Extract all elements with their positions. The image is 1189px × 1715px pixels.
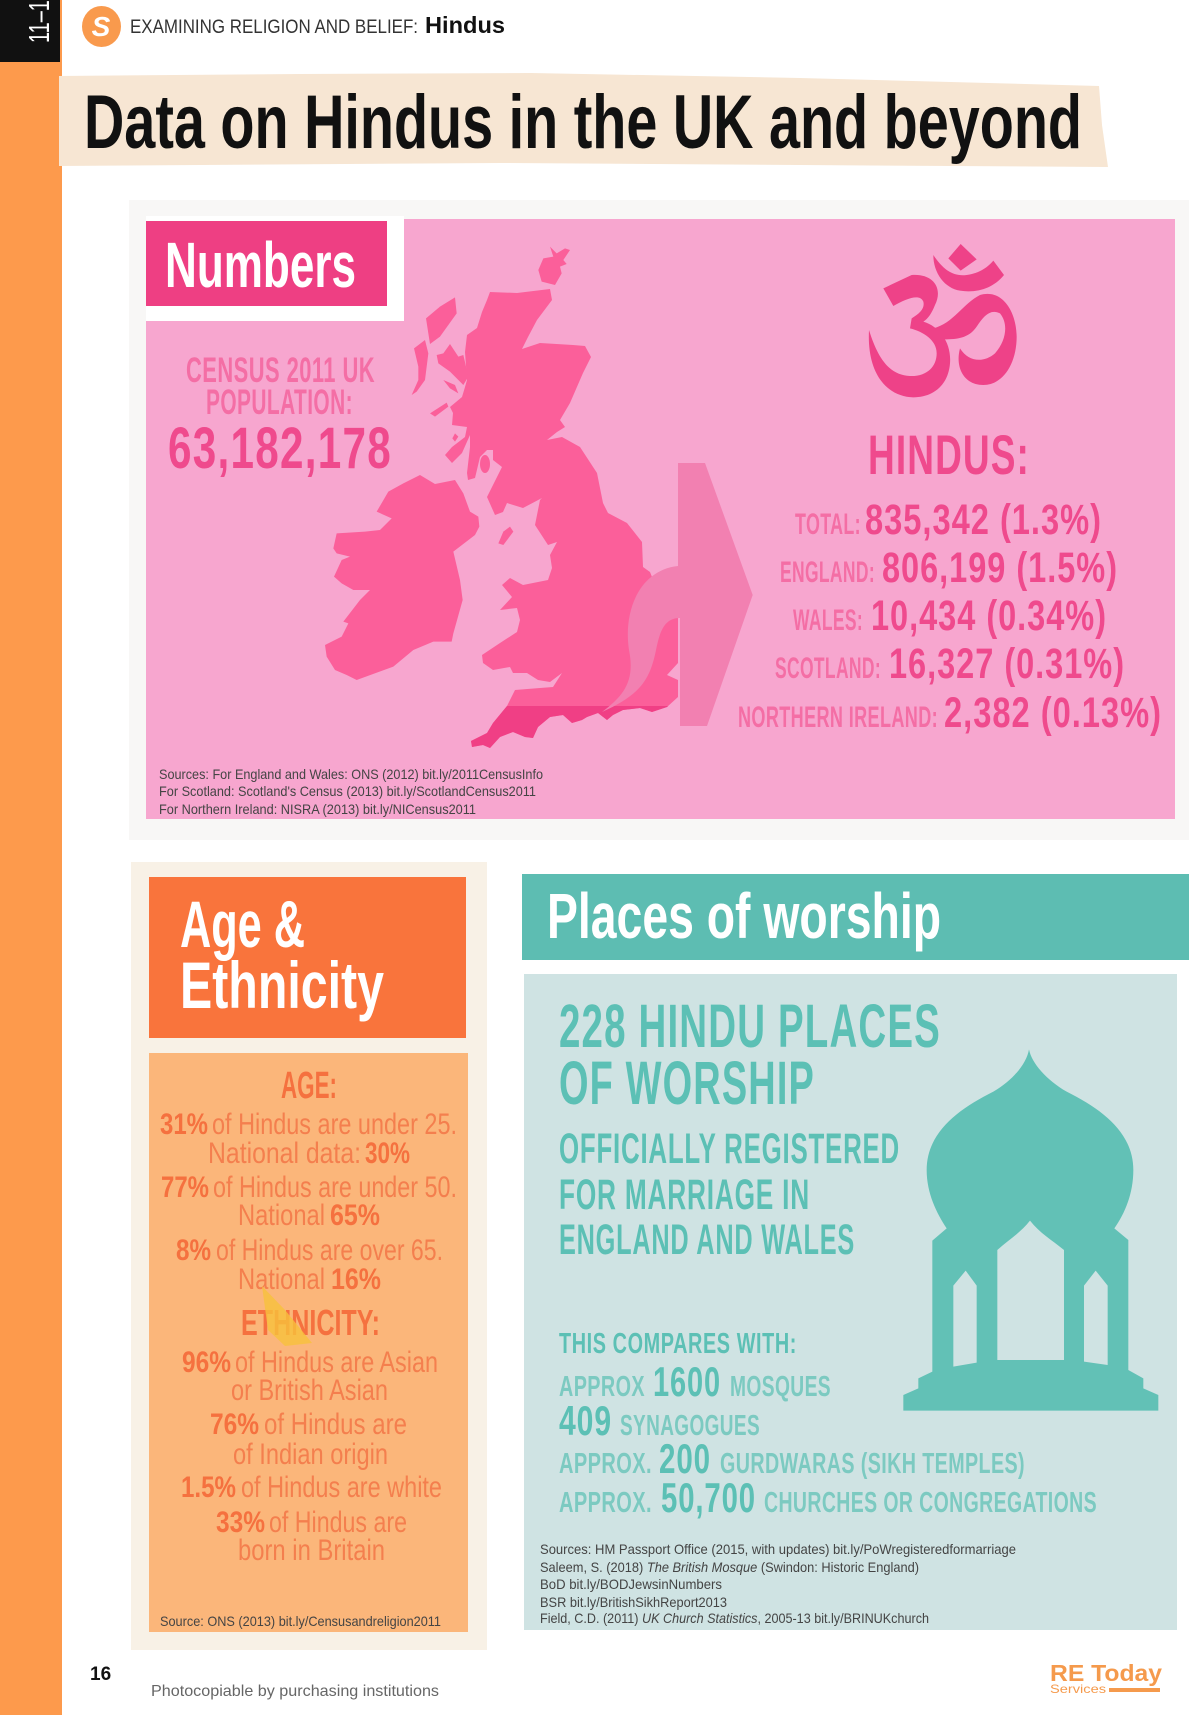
heading: age and ethnicity: Age & [180, 887, 305, 961]
panel: places of worship [522, 874, 1189, 1630]
census population: 63,182,178 [168, 416, 392, 481]
worship headline: 228 HINDU PLACES [559, 992, 941, 1060]
title band [59, 73, 1108, 167]
ethnicity stats: of Hindus are Asian [235, 1346, 438, 1379]
age stats [160, 1065, 457, 1296]
row: gurdwaras: APPROX. [559, 1448, 652, 1480]
age stats: of Hindus are over 65. [216, 1234, 443, 1267]
census population: CENSUS 2011 UK [186, 351, 375, 390]
comparison list: THIS COMPARES WITH: [559, 1328, 797, 1360]
row: northern ireland [738, 689, 1162, 737]
logo: RE Today: Services [1050, 1682, 1106, 1696]
worship headline: OF WORSHIP [559, 1049, 815, 1117]
sources: worship: Saleem, S. (2018) The British Mosque (Swindon: Historic England) [540, 1559, 919, 1575]
heading: numbers: Numbers [165, 229, 356, 301]
comparison list [559, 1328, 1097, 1521]
heading: places of worship: Places of worship [547, 880, 941, 952]
logo: RE Today: RE Today [1050, 1660, 1162, 1686]
row: gurdwaras [559, 1435, 1025, 1482]
row: mosques: APPROX [559, 1371, 645, 1403]
age stats: 30% [365, 1137, 410, 1170]
ethnicity stats: 96% [182, 1346, 231, 1379]
row: churches: 50,700 [661, 1474, 756, 1521]
row: wales: WALES: [793, 604, 863, 637]
ethnicity stats: or British Asian [231, 1374, 388, 1407]
row: northern ireland: NORTHERN IRELAND: [738, 701, 938, 734]
sources: numbers [159, 766, 543, 817]
census population: POPULATION: [206, 383, 353, 422]
ethnicity stats: of Hindus are [264, 1408, 407, 1441]
row: england [780, 544, 1118, 592]
section label [130, 12, 505, 38]
hindus totals: HINDUS: [868, 423, 1030, 486]
ethnicity stats: of Hindus are white [241, 1471, 442, 1504]
row: scotland: SCOTLAND: [775, 652, 881, 685]
section header [82, 6, 505, 47]
arrow [602, 463, 753, 726]
icon: temple [903, 1049, 1158, 1411]
sources: worship: BoD bit.ly/BODJewsinNumbers [540, 1576, 722, 1592]
row: scotland [775, 640, 1125, 688]
row: mosques [559, 1358, 831, 1405]
age stats: National [238, 1263, 325, 1296]
worship headline: FOR MARRIAGE IN [559, 1171, 810, 1219]
heading: age and ethnicity: Ethnicity [180, 948, 384, 1022]
worship headline: OFFICIALLY REGISTERED [559, 1125, 900, 1173]
footer [90, 1660, 1162, 1700]
worship headline: ENGLAND AND WALES [559, 1216, 855, 1264]
yellow mark [262, 1286, 312, 1346]
page number: 16 [90, 1664, 111, 1685]
age stats: National data: [208, 1137, 361, 1170]
panel: numbers [129, 200, 1189, 840]
census population [168, 351, 392, 481]
row: synagogues [559, 1397, 760, 1444]
south coast shading [471, 706, 668, 748]
age stats: 65% [330, 1199, 380, 1232]
age stats: AGE: [281, 1065, 337, 1107]
age stats: of Hindus are under 25. [212, 1108, 457, 1141]
row: synagogues: 409 [559, 1397, 612, 1444]
row: synagogues: SYNAGOGUES [620, 1410, 760, 1442]
sources: worship: Sources: HM Passport Office (2015, with updates) bit.ly/PoWregisteredformarriage [540, 1541, 1016, 1557]
scottish islands [412, 247, 570, 473]
sources: worship: Field, C.D. (2011) UK Church Statistics, 2005-13 bit.ly/BRINUKchurch [540, 1610, 929, 1626]
row: england: 806,199 (1.5%) [882, 544, 1118, 592]
icon: om symbol [869, 244, 1017, 397]
panel: age and ethnicity [131, 862, 487, 1650]
orange side strip with age tab [0, 0, 62, 1715]
row: total [795, 496, 1102, 544]
hindus totals [738, 423, 1162, 737]
age stats: 8% [176, 1234, 211, 1267]
source: age and ethnicity: Source: ONS (2013) bit.ly/Censusandreligion2011 [160, 1613, 441, 1629]
worship headline [559, 992, 941, 1264]
heading: numbers [146, 221, 387, 306]
map of UK and Ireland [325, 247, 753, 748]
ethnicity stats: of Hindus are [269, 1506, 407, 1539]
logo: RE Today [1050, 1660, 1162, 1696]
ethnicity stats: born in Britain [238, 1534, 385, 1567]
row: england: ENGLAND: [780, 556, 875, 589]
ethnicity stats: 1.5% [181, 1471, 236, 1504]
sources: numbers: For Northern Ireland: NISRA (2013) bit.ly/NICensus2011 [159, 801, 476, 817]
section label: Hindus [425, 12, 505, 38]
row: churches: APPROX. [559, 1487, 652, 1519]
icon: S badge: S [92, 11, 111, 42]
icon: S badge [82, 6, 121, 47]
ethnicity stats [181, 1302, 442, 1567]
sources: numbers: Sources: For England and Wales: ONS (2012) bit.ly/2011CensusInfo [159, 766, 543, 782]
age stats: of Hindus are under 50. [213, 1171, 457, 1204]
sources: numbers: For Scotland: Scotland's Census (2013) bit.ly/ScotlandCensus2011 [159, 783, 536, 799]
ethnicity stats: 33% [216, 1506, 265, 1539]
row: mosques: 1600 [653, 1358, 721, 1405]
age stats: 31% [160, 1108, 208, 1141]
age stats: National [238, 1199, 325, 1232]
ethnicity stats: of Indian origin [233, 1438, 388, 1471]
row: mosques: MOSQUES [730, 1371, 831, 1403]
ireland [325, 475, 479, 680]
heading: places of worship [522, 874, 1189, 960]
row: wales [793, 592, 1107, 640]
age stats: 77% [161, 1171, 209, 1204]
row: total: 835,342 (1.3%) [865, 496, 1102, 544]
isle of man [498, 527, 513, 545]
sources: worship [540, 1541, 1016, 1626]
ethnicity stats: ETHNICITY: [241, 1302, 380, 1343]
photocopy note: Photocopiable by purchasing institutions [151, 1683, 439, 1700]
row: wales: 10,434 (0.34%) [871, 592, 1107, 640]
row: gurdwaras: 200 [659, 1435, 711, 1482]
heading: age and ethnicity [149, 877, 466, 1038]
sources: worship: BSR bit.ly/BritishSikhReport2013 [540, 1594, 727, 1610]
row: gurdwaras: GURDWARAS (SIKH TEMPLES) [720, 1448, 1025, 1480]
ethnicity stats: 76% [210, 1408, 259, 1441]
age stats: 16% [331, 1263, 381, 1296]
row: total: TOTAL: [795, 508, 861, 541]
row: churches [559, 1474, 1097, 1521]
section label: EXAMINING RELIGION AND BELIEF: [130, 17, 418, 38]
